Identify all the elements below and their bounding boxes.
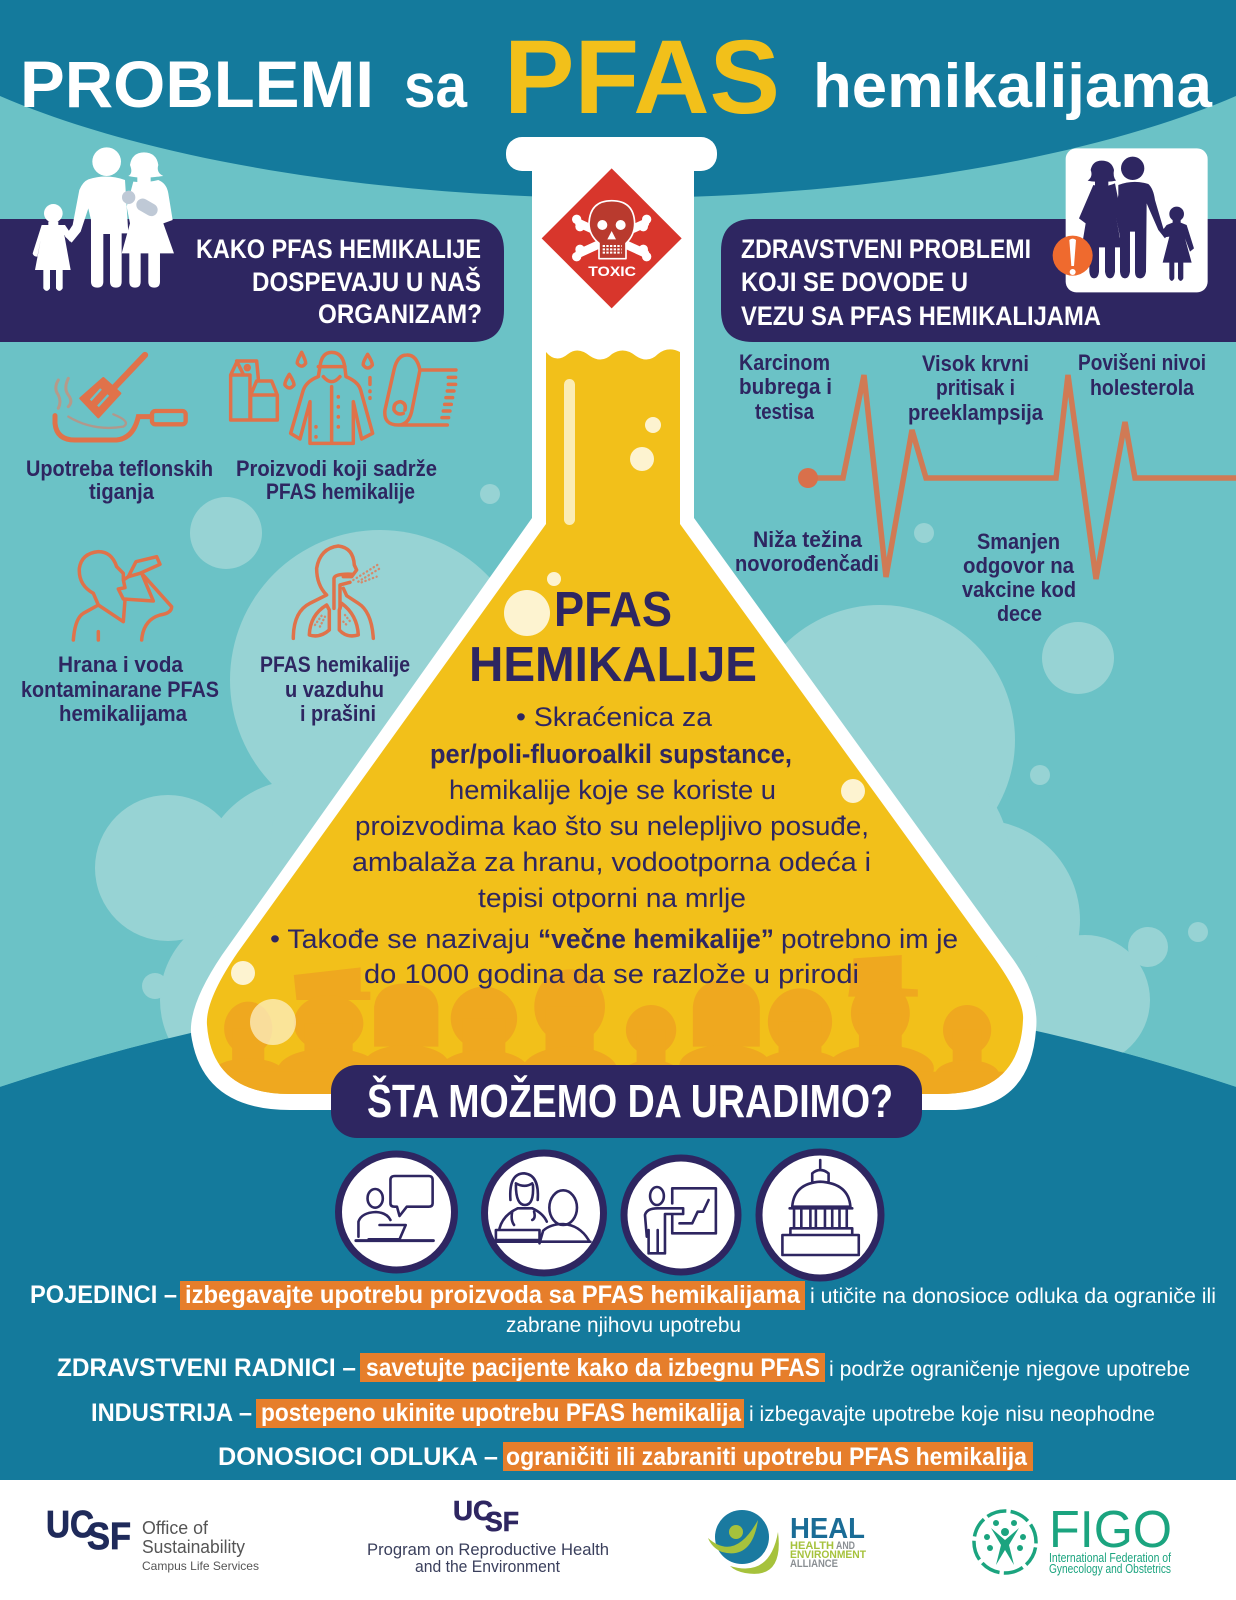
logo: HEAL: HEALTH [790, 1540, 834, 1552]
action: individuals [30, 1281, 1216, 1337]
text: products: Proizvodi koji sadrže [236, 456, 437, 481]
logo: FIGO [969, 1501, 1172, 1578]
logo: UCSF Office of Sustainability: Office of [142, 1518, 209, 1538]
logo: FIGO: Gynecology and Obstetrics [1049, 1562, 1171, 1576]
action: industry: i izbegavajte upotrebe koje nisu neophodne [749, 1403, 1155, 1426]
flask text: definition: hemikalije koje se koriste u [449, 775, 776, 805]
text: kidney and testicular cancer: bubrega i [739, 374, 832, 399]
text: reduced vaccine response: odgovor na [963, 553, 1075, 578]
text: products: PFAS hemikalije [266, 479, 415, 504]
text: reduced vaccine response: Smanjen [977, 529, 1060, 554]
heading: how PFAS enter [196, 234, 482, 329]
text: high cholesterol [1078, 350, 1206, 400]
action: industry: INDUSTRIJA – [91, 1399, 252, 1427]
text: high cholesterol: holesterola [1090, 375, 1195, 400]
text: air and dust [260, 652, 410, 726]
text: high blood pressure: Visok krvni [922, 351, 1029, 376]
flask heading [469, 583, 757, 692]
text: kidney and testicular cancer: testisa [755, 399, 815, 424]
text: food and water: kontaminarane PFAS [21, 677, 219, 702]
flask text: forever chemicals [270, 924, 958, 989]
flask text: forever chemicals: • Takođe se nazivaju [270, 924, 530, 954]
flask text: definition: tepisi otporni na mrlje [478, 883, 746, 913]
icon: toxic sign [542, 168, 682, 308]
logo: FIGO: International Federation of [1049, 1551, 1171, 1565]
flask heading: HEMIKALIJE [469, 638, 757, 692]
icon: teflon pan [55, 355, 186, 440]
icon: individuals [338, 1154, 454, 1270]
action: industry: postepeno ukinite upotrebu PFAS hemikalija [261, 1399, 742, 1427]
action: health workers: ZDRAVSTVENI RADNICI – [57, 1354, 356, 1382]
icon: family with alert [1053, 148, 1208, 292]
title: hemikalijama [813, 52, 1213, 121]
flask text: definition: per/poli-fluoroalkil supstance, [430, 739, 792, 769]
icon: lungs and airway [293, 546, 380, 638]
panel: how PFAS enter the body [0, 147, 504, 342]
icon: family [33, 147, 174, 291]
flask text: definition [352, 702, 871, 913]
action: individuals: i utičite na donosioce odluka da ograniče ili [810, 1285, 1216, 1308]
title: PFAS [504, 19, 780, 136]
text: high blood pressure: preeklampsija [908, 400, 1044, 425]
text: teflon pans: Upotreba teflonskih [26, 456, 213, 481]
action: health workers [57, 1353, 1190, 1382]
logo: HEAL: AND [836, 1540, 855, 1552]
text: reduced vaccine response [962, 529, 1076, 626]
chart: heartbeat line [798, 375, 1236, 579]
logo: UCSF Program on Reproductive Health: and the Environment [415, 1557, 560, 1576]
flask text: forever chemicals: potrebno im je [781, 924, 958, 954]
panel: health problems [721, 148, 1236, 342]
title [20, 19, 1213, 136]
icon: industry [624, 1158, 738, 1272]
logo: HEAL: ENVIRONMENT [790, 1549, 866, 1561]
icon: PFAS products [231, 352, 456, 443]
icon: decision makers [759, 1152, 881, 1278]
heading: what can we do: ŠTA MOŽEMO DA URADIMO? [367, 1075, 893, 1127]
text: air and dust: PFAS hemikalije [260, 652, 410, 677]
text: reduced vaccine response: dece [997, 601, 1042, 626]
action: decision makers [218, 1442, 1033, 1471]
text: kidney and testicular cancer [739, 350, 832, 424]
action: health workers: i podrže ograničenje njegove upotrebe [829, 1358, 1190, 1381]
flask heading: PFAS [554, 583, 672, 637]
flask text: forever chemicals: “večne hemikalije” [538, 924, 774, 954]
text: low birth weight: novorođenčadi [735, 551, 879, 576]
text: high cholesterol: Povišeni nivoi [1078, 350, 1206, 375]
heading: health problems [741, 234, 1101, 331]
logo: HEAL: ALLIANCE [790, 1558, 838, 1570]
text: reduced vaccine response: vakcine kod [962, 577, 1076, 602]
text: low birth weight: Niža težina [753, 527, 863, 552]
action: decision makers: DONOSIOCI ODLUKA – [218, 1443, 498, 1471]
logo: FIGO: FIGO [1049, 1501, 1172, 1559]
logo: UCSF Program on Reproductive Health: Program on Reproductive Health [367, 1540, 609, 1559]
logo: UCSF Office of Sustainability: Sustainability [142, 1537, 245, 1557]
flask liquid [207, 349, 1023, 1094]
text: food and water: hemikalijama [59, 701, 188, 726]
text: teflon pans [26, 456, 213, 504]
flask text: definition: • Skraćenica za [516, 702, 713, 732]
footer [0, 1480, 1236, 1600]
logo: UCSF Office of Sustainability: UC [46, 1504, 94, 1546]
title: sa [404, 52, 467, 121]
text: air and dust: u vazduhu [285, 677, 384, 702]
icon: toxic sign: TOXIC [588, 263, 636, 279]
text: high blood pressure [908, 351, 1044, 425]
action: health workers: savetujte pacijente kako da izbegnu PFAS [366, 1354, 820, 1382]
flask text: definition: ambalaža za hranu, vodootporna odeća i [352, 847, 871, 877]
icon: person drinking [73, 552, 172, 640]
logo: UCSF Program on Reproductive Health: SF [485, 1506, 519, 1537]
action: individuals: POJEDINCI – [30, 1281, 177, 1309]
text: high blood pressure: pritisak i [936, 375, 1015, 400]
text: products [236, 456, 437, 504]
heading: health problems: KOJI SE DOVODE U [741, 267, 968, 297]
text: kidney and testicular cancer: Karcinom [739, 350, 830, 375]
flask text: definition: proizvodima kao što su nelepljivo posuđe, [355, 811, 869, 841]
text: food and water: Hrana i voda [58, 652, 184, 677]
text: low birth weight [735, 527, 879, 576]
bubbles [231, 379, 865, 1045]
flask [191, 137, 1040, 1110]
heading: how PFAS enter: DOSPEVAJU U NAŠ [252, 266, 481, 297]
text: food and water [21, 652, 219, 726]
people silhouettes [219, 955, 1005, 1094]
logo: HEAL [708, 1510, 866, 1574]
logo: UCSF Office of Sustainability [46, 1504, 259, 1573]
action: individuals: izbegavajte upotrebu proizvoda sa PFAS hemikalijama [185, 1281, 801, 1309]
logo: HEAL: HEAL [790, 1513, 865, 1545]
logo: UCSF Office of Sustainability: SF [87, 1516, 131, 1558]
icon: health workers [484, 1153, 604, 1273]
heading: health problems: ZDRAVSTVENI PROBLEMI [741, 234, 1031, 264]
heading: how PFAS enter: KAKO PFAS HEMIKALIJE [196, 234, 481, 264]
heading: what can we do [331, 1065, 922, 1138]
action: industry [91, 1399, 1155, 1428]
logo: UCSF Program on Reproductive Health [367, 1495, 609, 1576]
title: PROBLEMI [20, 47, 374, 121]
logo: UCSF Office of Sustainability: Campus Life Services [142, 1559, 259, 1573]
text: teflon pans: tiganja [89, 479, 155, 504]
heading: how PFAS enter: ORGANIZAM? [318, 299, 482, 329]
action: individuals: zabrane njihovu upotrebu [506, 1314, 741, 1337]
flask text: forever chemicals: do 1000 godina da se razlože u prirodi [364, 959, 859, 989]
logo: UCSF Program on Reproductive Health: UC [453, 1495, 493, 1526]
heading: health problems: VEZU SA PFAS HEMIKALIJAMA [741, 301, 1101, 331]
action: decision makers: ograničiti ili zabraniti upotrebu PFAS hemikalija [506, 1443, 1028, 1471]
text: air and dust: i prašini [300, 701, 376, 726]
